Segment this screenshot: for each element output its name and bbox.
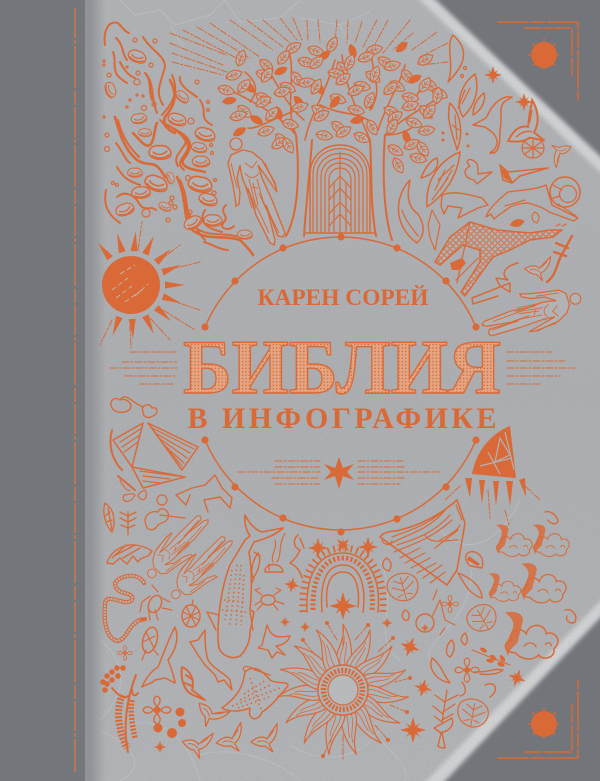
illustration: large sun bbox=[276, 621, 412, 760]
ornament: star with dashes under title bbox=[238, 457, 440, 489]
manta ray bbox=[222, 666, 288, 719]
wheat bbox=[112, 675, 138, 752]
deer bbox=[441, 193, 488, 218]
figures bbox=[134, 512, 221, 580]
swordfish small bbox=[258, 625, 290, 658]
small fish bbox=[252, 552, 260, 583]
illustration: right half sun bbox=[445, 426, 540, 525]
flying birds bbox=[192, 692, 230, 730]
grapes bbox=[100, 665, 126, 693]
illustration: mountain with waves bbox=[380, 500, 465, 585]
illustration: radial crescent bbox=[303, 548, 383, 620]
swallow bbox=[549, 139, 576, 167]
flamingo mushroom bbox=[472, 263, 518, 304]
panel: bottom right leather corner bbox=[407, 581, 600, 781]
illustration: clouds lower left bbox=[111, 397, 157, 417]
illustration: three small stars bbox=[300, 533, 393, 632]
door arch bbox=[306, 145, 374, 233]
decorative hexagonal paper pattern bbox=[100, 0, 520, 781]
illustration: clouds lower right bbox=[489, 512, 576, 659]
illustration: lower left creatures bbox=[100, 475, 304, 760]
beetle bbox=[140, 585, 172, 620]
small bird bbox=[523, 253, 551, 282]
heading: author: КАРЕН СОРЕЙ bbox=[258, 285, 429, 310]
ornament: bottom right corner bbox=[498, 680, 578, 758]
giraffe bbox=[435, 222, 566, 296]
lizard bbox=[547, 236, 572, 282]
starfish bbox=[283, 576, 301, 594]
illustration: rivers and stones bbox=[103, 23, 253, 255]
small creature bbox=[450, 258, 466, 270]
heading: main title: БИБЛИЯ bbox=[183, 324, 501, 410]
stones bbox=[103, 48, 252, 239]
illustration: open book bbox=[110, 423, 198, 490]
feathers and leaves bbox=[398, 35, 533, 243]
medallion: arcs with dots bbox=[201, 233, 480, 536]
goose bbox=[465, 159, 492, 184]
dolphin bbox=[142, 627, 177, 687]
whale shark bbox=[207, 515, 283, 658]
leaves and sprigs bbox=[104, 480, 185, 564]
illustration: horizontal rays right of title bbox=[507, 352, 575, 384]
hummingbird bbox=[497, 100, 550, 155]
seahorse bbox=[290, 535, 304, 578]
frog bbox=[140, 626, 160, 660]
turtle bbox=[522, 138, 544, 158]
illustration: right side animals bbox=[398, 35, 581, 343]
lion bbox=[486, 165, 580, 229]
tree branches bbox=[226, 52, 435, 140]
illustration: tree of life bbox=[217, 35, 449, 240]
illustration: radiating dashes above tree bbox=[170, 18, 448, 75]
panel: leather spine bbox=[0, 0, 106, 781]
ornament: top right corner bbox=[498, 22, 578, 100]
tree leaves bbox=[217, 35, 449, 175]
small bird with antler bbox=[428, 210, 440, 250]
pebbles bbox=[103, 38, 216, 222]
crab bbox=[255, 588, 284, 610]
illustration: lower right botanicals bbox=[383, 552, 529, 748]
shrimp bbox=[182, 667, 205, 700]
hammerhead shark bbox=[190, 630, 232, 690]
lying figure bbox=[481, 284, 581, 343]
heading: subtitle: В ИНФОГРАФИКЕ bbox=[188, 402, 496, 435]
cat-like animal bbox=[176, 475, 232, 512]
flower bbox=[143, 696, 186, 738]
illustration: man figure bbox=[228, 138, 285, 245]
snake bbox=[105, 576, 145, 641]
pinecone bbox=[182, 600, 200, 627]
crane bird bbox=[473, 97, 512, 153]
illustration: horizontal rays left of title bbox=[110, 352, 177, 384]
panel: top right leather corner bbox=[399, 0, 600, 191]
wavy water lines bbox=[105, 23, 129, 45]
jellyfish bbox=[265, 533, 285, 572]
tree trunks bbox=[286, 135, 392, 240]
illustration: left sun bbox=[95, 222, 200, 348]
stitched spine line bbox=[74, 8, 76, 772]
